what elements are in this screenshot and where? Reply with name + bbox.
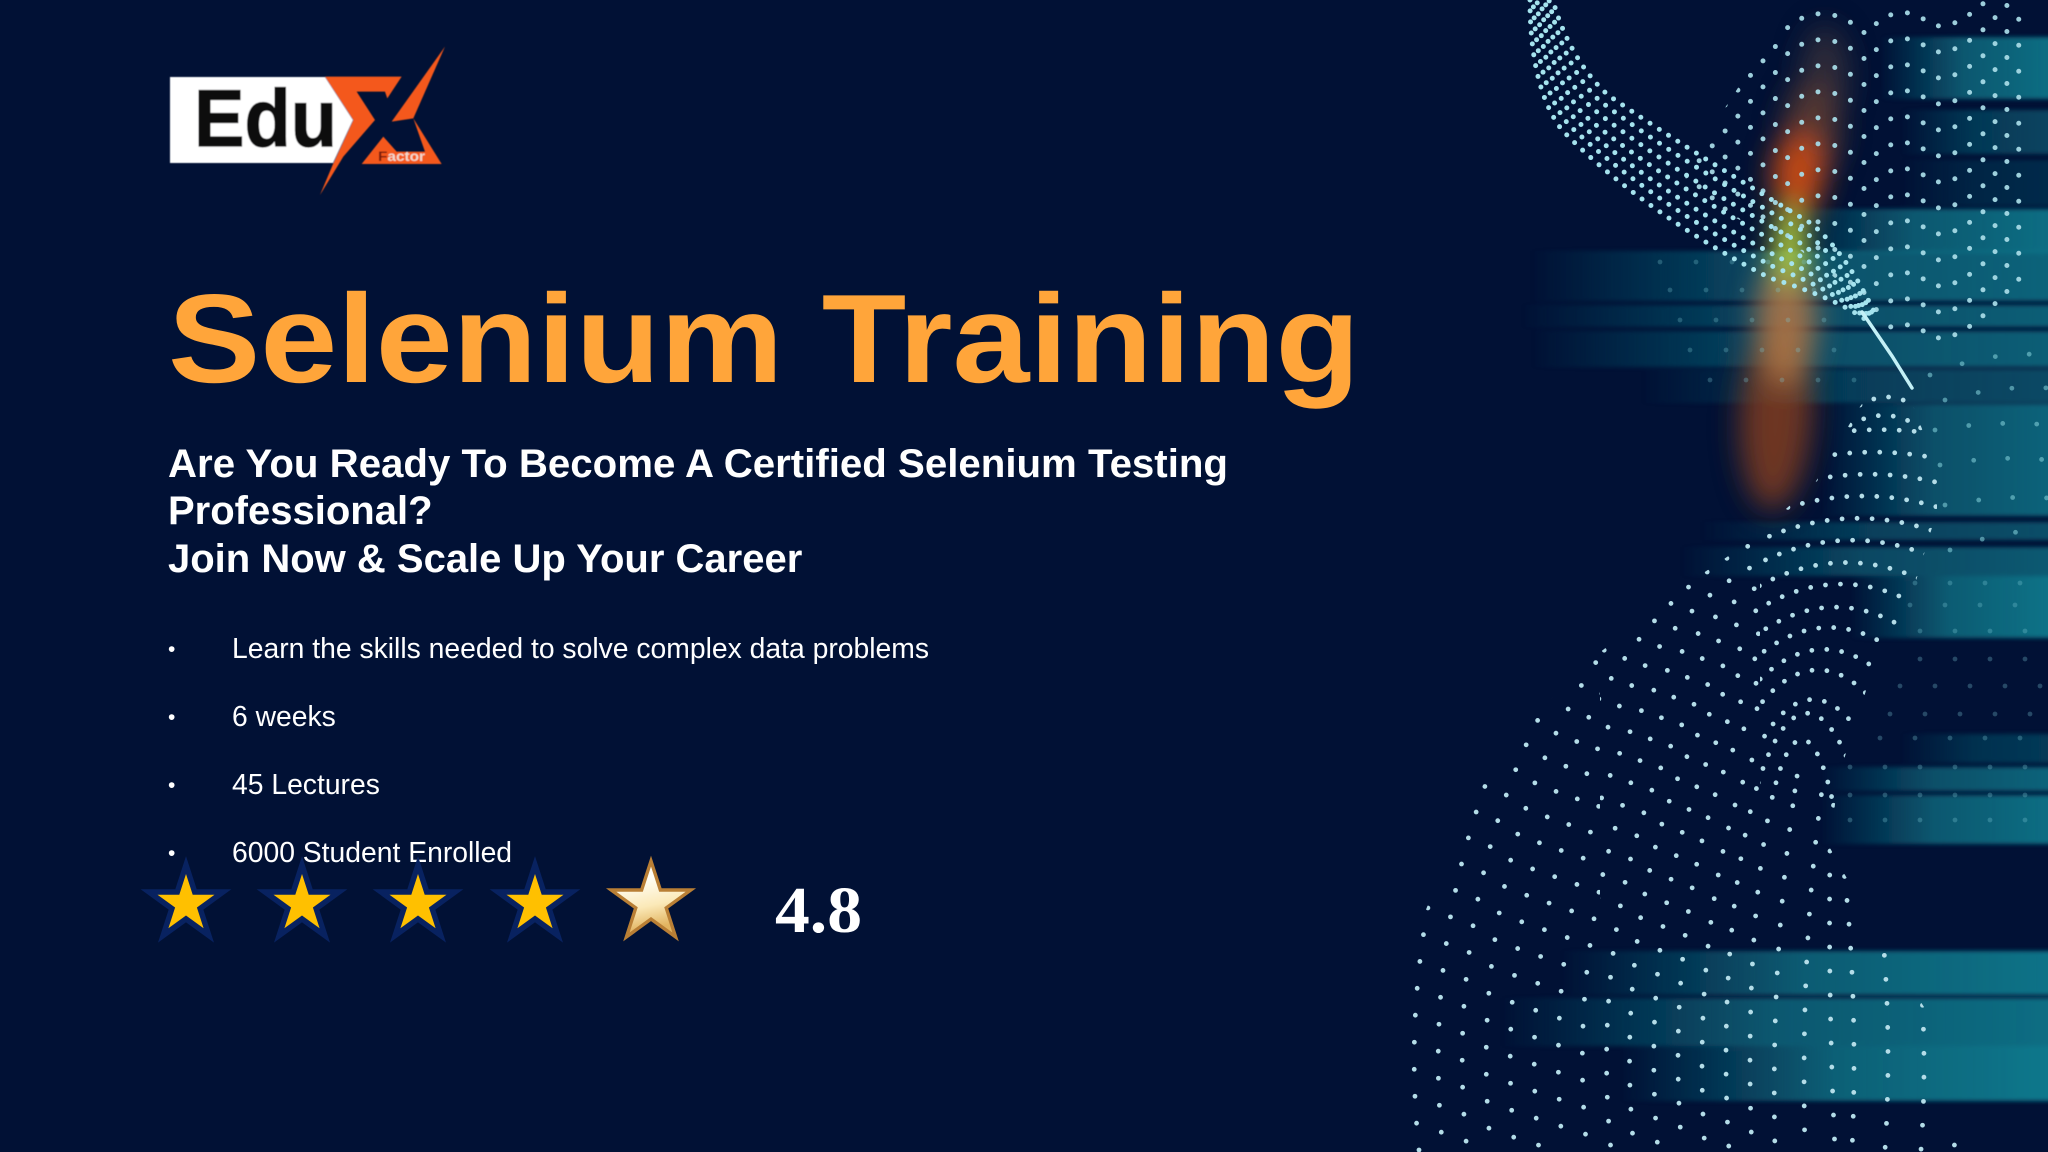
star 1	[158, 874, 214, 928]
logo orange X	[320, 47, 445, 195]
dotted upper wave rows	[1660, 0, 2020, 346]
bullet list: •	[168, 842, 175, 865]
star 2	[274, 874, 330, 928]
star 3	[390, 874, 446, 928]
logo wordmark: Edu	[194, 74, 337, 164]
star rating	[158, 856, 696, 941]
decorative teal light bands	[1500, 37, 2048, 1101]
orange vertical glow	[1735, 25, 1849, 512]
subtitle	[168, 442, 1228, 581]
bullet list: •	[168, 638, 175, 661]
dotted ribbon strand	[1530, 0, 1878, 320]
bullet list: 6000 Student Enrolled	[232, 836, 512, 868]
bullet list: Learn the skills needed to solve complex data problems	[232, 632, 929, 664]
bullet list: •	[168, 774, 175, 797]
bullet list	[168, 632, 929, 868]
subtitle: Are You Ready To Become A Certified Selenium Testing	[168, 442, 1228, 486]
bullet list: •	[168, 706, 175, 729]
sparse dots on the right	[1660, 262, 2048, 820]
dotted lower wave body	[1414, 397, 1960, 1150]
bullet list: 6 weeks	[232, 700, 336, 732]
logo tagline: Factor	[378, 148, 426, 164]
subtitle: Professional?	[168, 489, 433, 533]
title: Selenium Training	[168, 268, 1360, 409]
subtitle: Join Now & Scale Up Your Career	[168, 537, 802, 581]
logo white plate	[170, 77, 353, 163]
bright ribbon tail	[1862, 312, 1912, 388]
logo: EduX Factor	[170, 47, 445, 195]
bullet list: 45 Lectures	[232, 768, 380, 800]
star 5	[606, 856, 696, 941]
rating value: 4.8	[775, 874, 862, 947]
star 4	[506, 874, 564, 928]
